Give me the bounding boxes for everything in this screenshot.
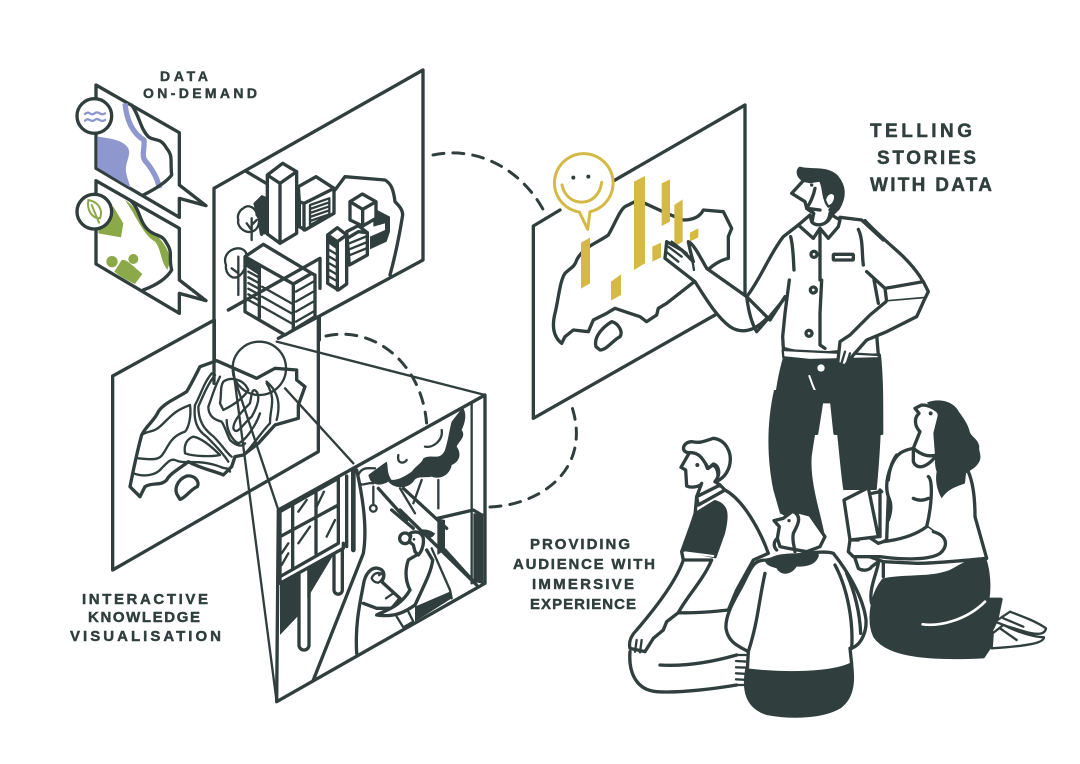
magnifier circle and projection lines bbox=[233, 342, 485, 702]
contour map of island bbox=[130, 361, 305, 499]
figure: seated person seen from behind bbox=[726, 511, 866, 716]
panel: greenery data layer bbox=[77, 181, 206, 313]
figure: presenter legs bbox=[768, 390, 882, 537]
collar bbox=[798, 215, 840, 238]
figure: seated woman holding books bbox=[844, 400, 1046, 657]
figure: seated man with dark sleeve bbox=[630, 438, 768, 692]
feet bbox=[992, 612, 1046, 648]
trousers upper bbox=[773, 355, 882, 433]
figure: presenter bbox=[665, 215, 927, 433]
connector: dashed arc to storytelling panel bbox=[433, 153, 546, 215]
trousers bbox=[746, 665, 852, 716]
heading: providing audience with immersive experience: PROVIDING bbox=[530, 536, 630, 553]
heading: data on-demand: DATA bbox=[160, 68, 208, 84]
back bbox=[726, 552, 866, 673]
heading: interactive knowledge visualisation: VISUALISATION bbox=[70, 628, 221, 645]
figure: woman in street scene bbox=[377, 529, 452, 627]
heading: telling stories with data: STORIES bbox=[877, 148, 976, 169]
heading: telling stories with data bbox=[870, 121, 992, 196]
heading: providing audience with immersive experience: AUDIENCE WITH bbox=[513, 556, 655, 573]
window with frame and stilts bbox=[280, 403, 472, 680]
heading: interactive knowledge visualisation bbox=[70, 591, 221, 645]
belt bbox=[783, 350, 879, 360]
building: tall tower bbox=[267, 163, 297, 243]
map outline behind buildings bbox=[335, 177, 403, 275]
panel: water data layer bbox=[77, 85, 206, 217]
panel: storytelling map on screen bbox=[533, 105, 745, 418]
shirt body fill bbox=[747, 215, 885, 352]
head and neck bbox=[913, 405, 940, 456]
face bbox=[792, 180, 838, 226]
panel: contour map layer bbox=[113, 320, 485, 702]
dark hair bun bbox=[765, 552, 819, 574]
long hair bbox=[927, 400, 980, 498]
shirt outlines bbox=[747, 221, 927, 332]
legs and skirt bbox=[871, 560, 1001, 657]
arm and hand bbox=[848, 523, 945, 559]
rolled sleeve bbox=[885, 282, 928, 302]
connector: dashed arc from map to street view bbox=[326, 334, 427, 430]
hair bbox=[684, 438, 730, 482]
buildings: right cluster bbox=[328, 194, 390, 290]
heading: providing audience with immersive experience: EXPERIENCE bbox=[530, 596, 636, 613]
heading: data on-demand: ON-DEMAND bbox=[143, 85, 257, 101]
panel: immersive street view bbox=[277, 395, 485, 702]
books bbox=[844, 488, 882, 570]
heading: interactive knowledge visualisation: INTERACTIVE bbox=[82, 591, 208, 608]
heading: interactive knowledge visualisation: KNOWLEDGE bbox=[88, 609, 200, 626]
dark sleeve bbox=[683, 502, 726, 557]
head bbox=[774, 511, 825, 552]
island outline bbox=[132, 202, 172, 290]
connector: dashed arc from street view to storytelling panel bbox=[490, 407, 576, 507]
tree: front left bbox=[225, 248, 247, 295]
torso bbox=[860, 448, 987, 563]
head bbox=[681, 452, 720, 497]
forearm and hand bbox=[838, 298, 925, 366]
building: low block with shutters bbox=[298, 177, 334, 230]
presenter: head and collar bbox=[791, 168, 883, 280]
island outline bbox=[132, 105, 172, 195]
icon: water waves bbox=[77, 99, 112, 133]
tree: back left bbox=[238, 195, 267, 240]
heading: telling stories with data: WITH DATA bbox=[870, 175, 992, 196]
map of island bbox=[553, 202, 732, 350]
green areas bbox=[98, 200, 171, 284]
heading: providing audience with immersive experience bbox=[513, 536, 655, 613]
icon: leaf bbox=[77, 194, 112, 229]
figure: person from behind bbox=[356, 568, 400, 653]
heading: data on-demand bbox=[143, 68, 257, 101]
legs bbox=[630, 652, 737, 692]
shirt details bbox=[791, 217, 883, 280]
panel: 3D buildings layer bbox=[214, 70, 423, 383]
hair bbox=[798, 168, 843, 213]
water bodies bbox=[97, 103, 159, 188]
street view: wall, woman and figure bbox=[356, 510, 483, 653]
heading: providing audience with immersive experience: IMMERSIVE bbox=[532, 576, 634, 593]
pointing arm bbox=[665, 242, 768, 331]
wall block bbox=[392, 510, 483, 585]
presenter: lower shirt, hand on hip bbox=[770, 280, 928, 366]
tree canopy in street view bbox=[358, 407, 465, 528]
icon: smiley speech bubble bbox=[554, 154, 613, 229]
torso and arm bbox=[630, 485, 768, 652]
heading: telling stories with data: TELLING bbox=[870, 121, 972, 142]
bar chart on map bbox=[581, 176, 698, 301]
building: large striped block bbox=[228, 244, 320, 335]
